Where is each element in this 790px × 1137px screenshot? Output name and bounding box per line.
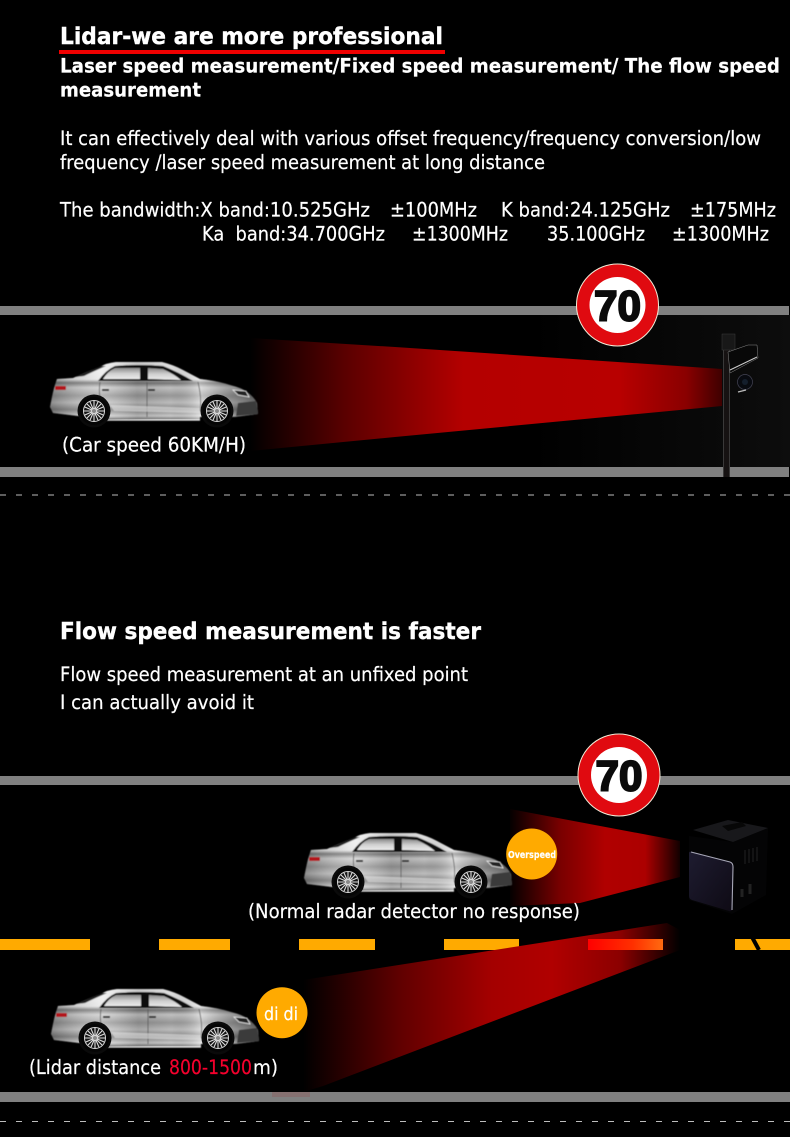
normal radar detector label: (Normal radar detector no response): [248, 900, 580, 923]
text block: flow speed description: Flow speed measurement at an unfixed point: [60, 663, 468, 686]
text block: flow speed description: [60, 663, 468, 714]
text block: capability description: frequency /laser speed measurement at long distance: [60, 151, 545, 174]
icon: speed limit sign 70: 70: [596, 752, 642, 800]
radar beam upper: [510, 809, 680, 906]
text block: bandwidth figures: 35.100GHz: [547, 222, 645, 246]
text block: bandwidth figures: ±1300MHz: [672, 222, 769, 246]
text block: bandwidth figures: ±175MHz: [690, 198, 776, 222]
icon: speed limit sign 70: [578, 734, 660, 816]
panel: fixed camera road scene: [0, 264, 790, 477]
icon: car with lidar warning: [51, 989, 259, 1054]
heading: flow speed measurement: Flow speed measurement is faster: [60, 617, 481, 645]
road edge bottom: [0, 467, 789, 477]
road edge bottom: [0, 1092, 790, 1102]
radar beam lower: [303, 923, 680, 1092]
car speed label: (Car speed 60KM/H): [62, 434, 246, 456]
panel: flow radar road scene: [0, 734, 790, 1102]
subheading: measurement types: measurement: [60, 78, 201, 102]
road edge top: [0, 776, 790, 785]
overspeed badge: Overspeed: [508, 850, 556, 861]
road edge top: [0, 306, 789, 315]
overspeed badge: [506, 828, 557, 880]
lidar distance label: (Lidar distance: [29, 1056, 161, 1079]
lidar distance label: [29, 1056, 278, 1079]
main heading: Lidar-we are more professional: [60, 22, 443, 50]
text block: bandwidth figures: Ka band:34.700GHz: [202, 222, 385, 246]
lane markings: [0, 939, 790, 950]
text block: bandwidth figures: [59, 198, 776, 246]
icon: roadside speed camera: [722, 334, 758, 477]
icon: flow speed radar box: [689, 820, 768, 950]
section divider: [0, 494, 790, 496]
text block: bandwidth figures: K band:24.125GHz: [501, 198, 670, 222]
lane marking lit red: [588, 939, 663, 950]
icon: car at 60 km/h: [50, 362, 258, 428]
text block: capability description: [60, 127, 761, 174]
lidar distance label: m): [253, 1056, 278, 1079]
icon: car over the limit: [304, 833, 512, 898]
di di badge: [256, 987, 308, 1038]
laser beam: [250, 338, 722, 451]
text block: bandwidth figures: ±100MHz: [390, 198, 477, 222]
section divider: [0, 1120, 790, 1122]
subheading: measurement types: [60, 54, 780, 102]
di di badge: di di: [264, 1004, 298, 1025]
icon: speed limit sign 70: 70: [594, 282, 641, 330]
text block: bandwidth figures: ±1300MHz: [412, 222, 508, 246]
text block: flow speed description: I can actually avoid it: [60, 691, 254, 714]
lidar distance label: 800-1500: [169, 1056, 252, 1079]
text block: bandwidth figures: The bandwidth:X band:10.525GHz: [59, 198, 370, 222]
icon: speed limit sign 70: [576, 264, 658, 346]
